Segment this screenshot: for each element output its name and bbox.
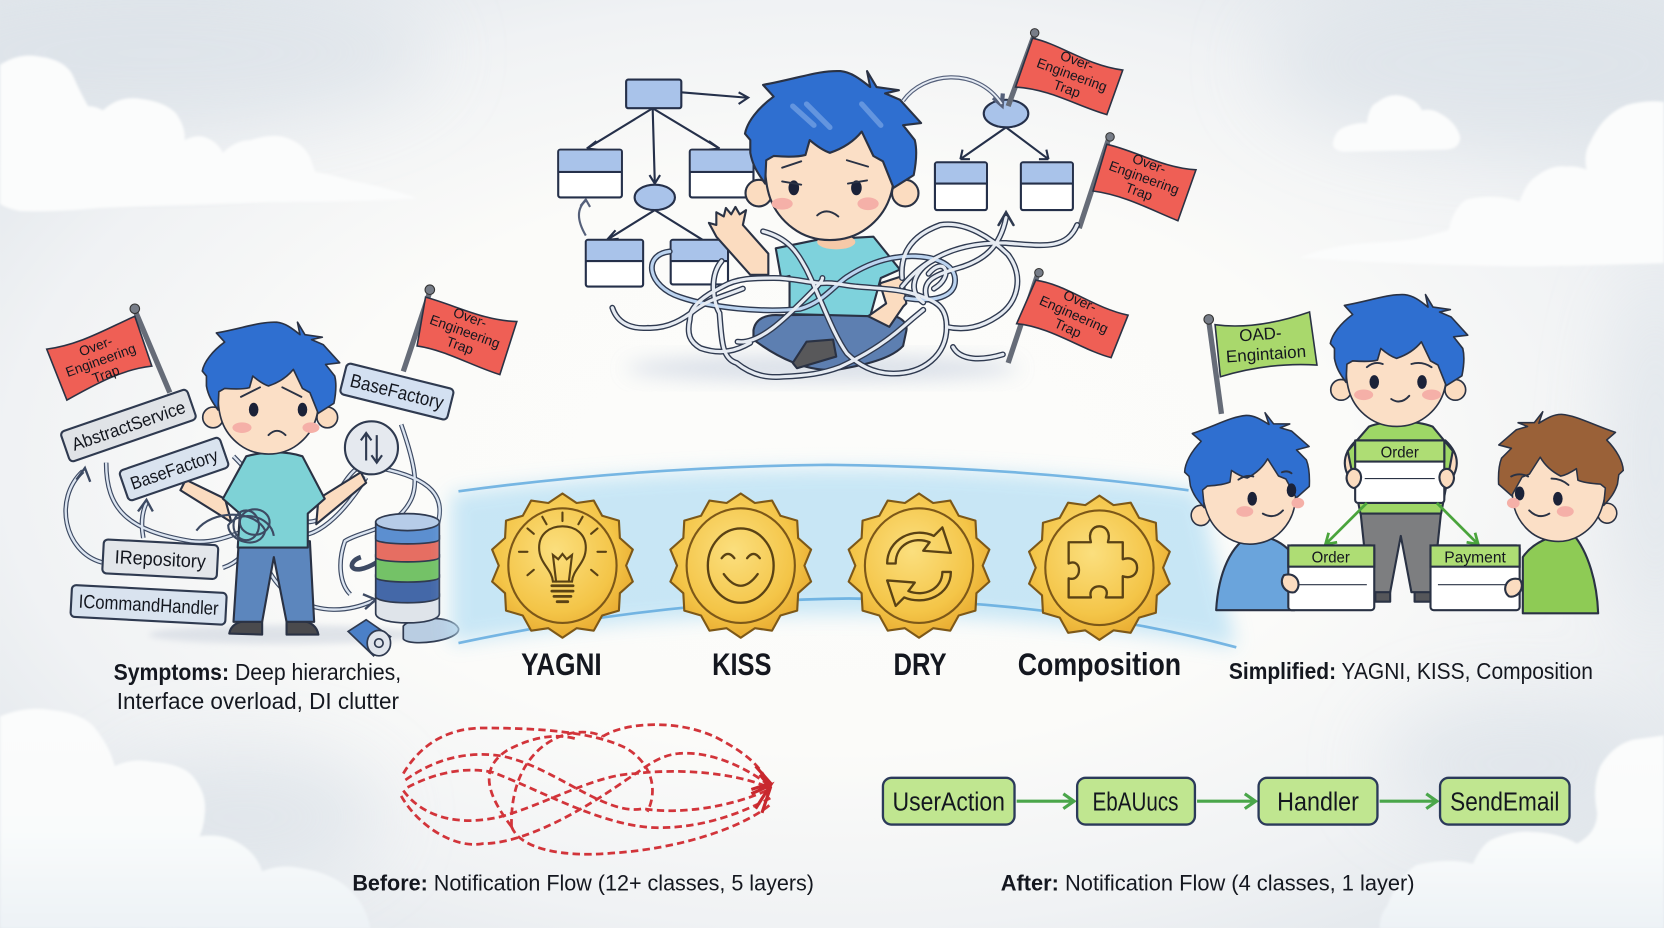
cloud top left xyxy=(0,56,417,211)
flag 2 xyxy=(1079,133,1196,228)
node Handler xyxy=(1259,778,1377,825)
medal: DRY xyxy=(849,493,989,638)
flag 3: Engineering xyxy=(1037,293,1110,336)
right flag xyxy=(403,285,517,375)
face features xyxy=(1354,363,1441,402)
IRepository tag: IRepository xyxy=(114,547,207,573)
flag 3: Trap xyxy=(1052,316,1084,341)
arms xyxy=(180,472,366,524)
left caption: Symptoms: Deep hierarchies, xyxy=(114,659,401,685)
flag 1: Trap xyxy=(1051,77,1083,101)
neck xyxy=(817,235,855,249)
Order card top xyxy=(1355,440,1444,503)
green flag: Engintaion xyxy=(1225,342,1307,366)
face features xyxy=(772,160,879,216)
node SendEmail: SendEmail xyxy=(1450,789,1559,817)
hands on top card xyxy=(1347,469,1454,488)
face features xyxy=(1236,471,1304,517)
right flag: Trap xyxy=(444,334,476,358)
flag 1 xyxy=(1008,29,1123,115)
flag 1: Engineering xyxy=(1035,55,1109,95)
left panel: symptoms illustration xyxy=(47,285,517,656)
flag 3 xyxy=(1008,268,1128,363)
node SendEmail xyxy=(1440,778,1570,825)
arrow xyxy=(1380,794,1437,809)
Payment card xyxy=(1431,545,1520,610)
node EbAUucs xyxy=(1077,778,1195,825)
right flag: Engineering xyxy=(428,312,502,351)
flag 2: Trap xyxy=(1123,180,1155,204)
left flag: Engineering xyxy=(64,341,138,380)
green flag: OAD- xyxy=(1239,323,1282,345)
team lead xyxy=(1330,295,1468,602)
waving arm xyxy=(709,207,768,275)
node EbAUucs: EbAUucs xyxy=(1093,789,1178,817)
node UserAction xyxy=(883,778,1015,825)
after flow xyxy=(883,778,1570,825)
principles band xyxy=(451,465,1236,647)
standing developer xyxy=(180,322,366,635)
head xyxy=(1330,295,1468,426)
before caption: Before: Notification Flow (12+ classes, 5 layers) xyxy=(352,870,814,895)
cloud bottom right xyxy=(1380,735,1664,928)
seated developer xyxy=(709,71,921,370)
arms xyxy=(1345,440,1457,484)
medal: Composition xyxy=(1029,496,1170,640)
ICommandHandler tag xyxy=(70,585,227,625)
left teammate xyxy=(1178,407,1321,610)
cloud right xyxy=(1300,101,1664,266)
principle labels xyxy=(521,646,1181,682)
medal: YAGNI xyxy=(492,493,633,638)
connector wires xyxy=(66,424,440,610)
left caption xyxy=(114,659,401,714)
icon: recycle arrows xyxy=(887,527,951,606)
shoes xyxy=(1375,590,1431,602)
right caption: Simplified: YAGNI, KISS, Composition xyxy=(1229,658,1593,684)
left flag xyxy=(47,304,170,400)
right panel: simplified team xyxy=(1178,295,1630,613)
node Handler: Handler xyxy=(1277,789,1359,817)
principle labels: YAGNI xyxy=(521,646,602,682)
flag 1: Over- xyxy=(1058,48,1096,74)
arrow xyxy=(1017,794,1074,809)
Order card xyxy=(1288,545,1374,610)
icon: puzzle piece xyxy=(1069,526,1137,597)
hands on lower cards xyxy=(1282,574,1522,597)
principle labels: DRY xyxy=(894,646,947,682)
ground shadow xyxy=(626,355,1019,381)
shirt xyxy=(776,237,900,316)
flag 2: Engineering xyxy=(1107,158,1181,197)
pants xyxy=(1360,511,1441,592)
ICommandHandler tag: ICommandHandler xyxy=(78,592,220,620)
knot on shirt xyxy=(196,509,274,542)
face features xyxy=(232,387,319,435)
left caption: Interface overload, DI clutter xyxy=(117,688,399,714)
cloud small top right xyxy=(1333,95,1460,152)
left flag: Over- xyxy=(77,333,114,359)
shirt xyxy=(1348,422,1453,514)
head xyxy=(745,71,921,240)
sync circle xyxy=(345,421,398,474)
AbstractService tag: AbstractService xyxy=(69,397,188,455)
arrowheads converge xyxy=(751,766,770,813)
class diagram left xyxy=(558,80,753,287)
BaseFactory tag small: BaseFactory xyxy=(128,445,221,494)
flag 2: Over- xyxy=(1130,151,1168,177)
hero: tangled developer and diagrams xyxy=(558,29,1196,381)
database stack xyxy=(376,514,459,643)
BaseFactory tag right: BaseFactory xyxy=(348,371,446,414)
cable tangle xyxy=(612,212,1077,377)
pants xyxy=(233,541,314,622)
left flag: Trap xyxy=(90,362,122,386)
right teammate xyxy=(1487,406,1630,613)
node UserAction: UserAction xyxy=(892,789,1005,817)
legs xyxy=(753,314,907,370)
shirt xyxy=(223,452,325,548)
principle labels: Composition xyxy=(1018,646,1181,682)
flag 3: Over- xyxy=(1061,287,1099,315)
cloud bottom left xyxy=(0,709,370,928)
ground shadow xyxy=(149,625,425,644)
class diagram right xyxy=(903,77,1073,210)
face features xyxy=(1507,474,1574,517)
shoes xyxy=(229,621,318,635)
head xyxy=(202,322,340,454)
medal: KISS xyxy=(670,493,811,638)
Order card: Order xyxy=(1312,549,1351,566)
green arrows xyxy=(1325,503,1478,544)
arrow xyxy=(1197,794,1255,809)
shoe xyxy=(793,340,836,368)
right flag: Over- xyxy=(451,305,489,331)
IRepository tag xyxy=(102,539,218,579)
right arm and hand xyxy=(868,276,906,327)
tangled before flow xyxy=(401,725,770,854)
roller xyxy=(348,620,391,656)
Payment card: Payment xyxy=(1444,549,1506,566)
icon: light bulb xyxy=(519,513,606,602)
icon: smile xyxy=(708,528,774,603)
Order card top: Order xyxy=(1381,444,1419,461)
principle labels: KISS xyxy=(712,646,772,682)
after caption: After: Notification Flow (4 classes, 1 layer) xyxy=(1001,870,1415,895)
green flag xyxy=(1204,312,1317,414)
